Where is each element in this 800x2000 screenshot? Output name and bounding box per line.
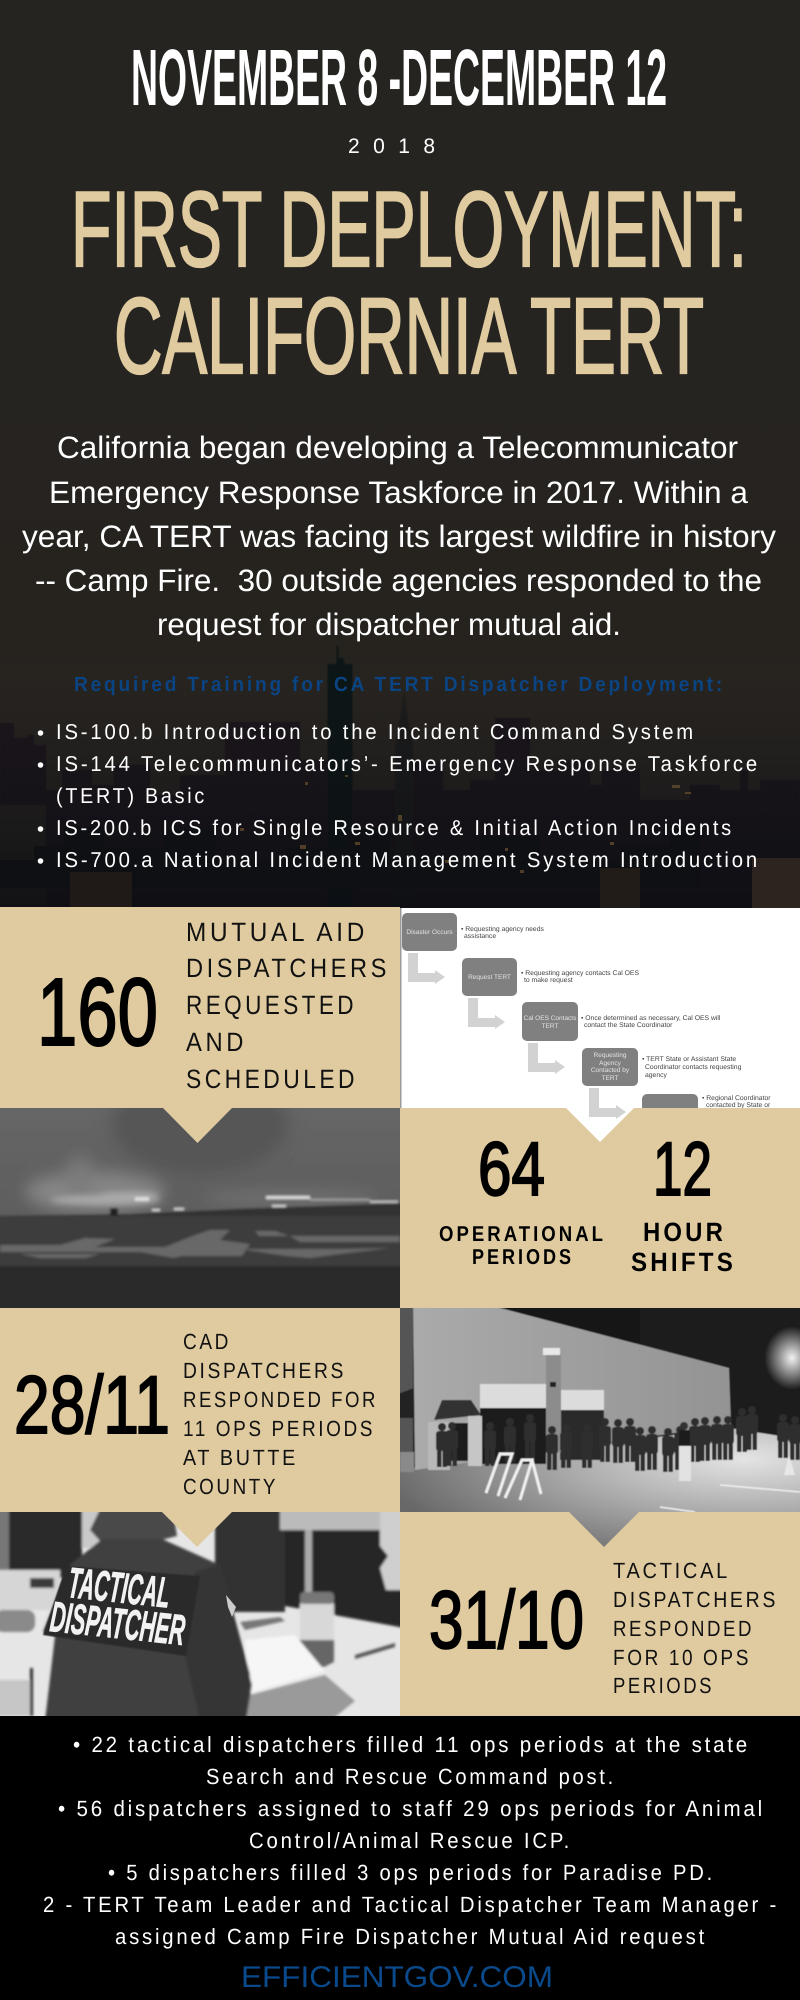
- parking lines: [660, 1485, 800, 1512]
- awning and side door: [400, 1400, 482, 1472]
- label: PERIODS: [613, 1673, 714, 1698]
- training list: (TERT) Basic: [56, 784, 207, 808]
- hair: [89, 1512, 178, 1542]
- arrow: beige pointer into dispatcher photo: [162, 1512, 232, 1547]
- stat labels: [439, 1217, 736, 1277]
- label: FOR 10 OPS: [613, 1645, 751, 1670]
- training heading: Required Training for CA TERT Dispatcher Deployment:: [74, 673, 725, 696]
- flow box labels: [406, 929, 630, 1082]
- intro paragraph: year, CA TERT was facing its largest wildfire in history: [22, 519, 776, 554]
- deployment details: Search and Rescue Command post.: [206, 1764, 616, 1789]
- training list: IS-700.a National Incident Management System Introduction: [56, 848, 760, 872]
- label: CAD: [183, 1329, 231, 1354]
- label: COUNTY: [183, 1474, 278, 1499]
- crowd of people: [436, 1406, 800, 1472]
- label: AT BUTTE: [183, 1445, 298, 1470]
- flow notes: • Once determined as necessary, Cal OES will: [581, 1015, 721, 1022]
- flow arrows: [408, 953, 626, 1119]
- panel: process flow diagram: [400, 907, 800, 1148]
- building wall: [413, 1300, 731, 1470]
- ground: [395, 1428, 800, 1552]
- panel: tactical dispatcher photo: [0, 1505, 405, 1721]
- flow box labels: TERT: [542, 1023, 558, 1030]
- footer panel: [0, 1716, 800, 2000]
- panel: 28/11 CAD dispatchers: [0, 1308, 400, 1512]
- vest patch with lettering: DISPATCHER: [48, 1593, 187, 1655]
- website link: EFFICIENTGOV.COM: [241, 1961, 553, 1994]
- label: REQUESTED: [186, 990, 357, 1020]
- flow notes: Coordinator contacts requesting: [645, 1064, 742, 1071]
- flow box labels: Disaster Occurs: [406, 929, 453, 936]
- panel: 64 operational periods and 12 hour shifts: [400, 1108, 800, 1308]
- flow box labels: Cal OES Contacts: [524, 1015, 577, 1022]
- sandwich board signs: [486, 1454, 541, 1500]
- panel: crowd photo outside warehouse: [395, 1300, 800, 1552]
- deployment details: • 5 dispatchers filled 3 ops periods for Paradise PD.: [108, 1860, 715, 1885]
- flow notes: • Requesting agency needs: [461, 926, 544, 933]
- smoke and flames: [25, 1156, 380, 1212]
- deployment details: assigned Camp Fire Dispatcher Mutual Aid request: [115, 1924, 707, 1949]
- stat labels: OPERATIONAL: [439, 1222, 606, 1246]
- label: [183, 1329, 378, 1499]
- label: RESPONDED: [613, 1616, 754, 1641]
- street lamp glow: [764, 1326, 800, 1390]
- title: [71, 169, 747, 396]
- water on ground: [0, 1230, 400, 1258]
- label: DISPATCHERS: [183, 1358, 346, 1383]
- flow notes: [461, 926, 771, 1109]
- flow box labels: TERT: [602, 1075, 618, 1082]
- flow notes: assistance: [464, 933, 496, 940]
- intro paragraph: request for dispatcher mutual aid.: [157, 607, 621, 642]
- label: [613, 1558, 778, 1698]
- traffic cone: [784, 1455, 795, 1475]
- flow notes: contacted by State or: [706, 1102, 771, 1109]
- flow notes: agency: [645, 1072, 668, 1079]
- panel: tactical dispatchers stat background: 31/10: [429, 1575, 584, 1666]
- label: 11 OPS PERIODS: [183, 1416, 375, 1441]
- deployment details: [43, 1732, 779, 1949]
- flow box labels: Request TERT: [468, 974, 511, 981]
- vest patch with lettering: [43, 1559, 200, 1656]
- skyline foreground and window lights: [0, 775, 800, 908]
- flow notes: • Requesting agency contacts Cal OES: [521, 970, 639, 977]
- flow notes: contact the State Coordinator: [584, 1022, 673, 1029]
- training list: IS-200.b ICS for Single Resource & Initial Action Incidents: [56, 816, 734, 840]
- intro paragraph: [22, 430, 776, 642]
- label: DISPATCHERS: [186, 953, 390, 983]
- hero panel: dark city skyline background: [0, 0, 800, 908]
- training list: IS-100.b Introduction to the Incident Command System: [56, 720, 696, 744]
- vest: [43, 1539, 252, 1721]
- year: 2018: [348, 135, 435, 158]
- foreground person: [679, 1422, 691, 1481]
- table items: [300, 1600, 334, 1644]
- label: MUTUAL AID: [186, 917, 368, 947]
- intro paragraph: California began developing a Telecommunicator: [57, 430, 738, 465]
- panel: wildfire photo: [0, 1108, 400, 1308]
- deployment details: • 22 tactical dispatchers filled 11 ops periods at the state: [73, 1732, 750, 1757]
- skyline silhouette: [0, 646, 800, 908]
- flow box labels: Agency: [599, 1060, 622, 1067]
- flow notes: to make request: [524, 977, 573, 984]
- panel: 28/11 CAD dispatchers: 28/11: [14, 1360, 170, 1451]
- flow box labels: Requesting: [594, 1052, 627, 1059]
- panel: tactical dispatchers stat background: [400, 1512, 800, 1716]
- label: RESPONDED FOR: [183, 1387, 378, 1412]
- intro paragraph: -- Camp Fire. 30 outside agencies responded to the: [35, 563, 762, 598]
- intro paragraph: Emergency Response Taskforce in 2017. Within a: [49, 475, 749, 510]
- flow notes: • TERT State or Assistant State: [642, 1056, 736, 1063]
- label: [186, 917, 390, 1094]
- flow boxes: [402, 913, 698, 1108]
- label: AND: [186, 1027, 247, 1057]
- stat labels: HOUR: [643, 1217, 726, 1247]
- bullet markers: [38, 730, 43, 864]
- panel: 160 mutual aid dispatchers: [0, 907, 400, 1108]
- flow box labels: Contacted by: [591, 1067, 630, 1074]
- background figures and wall: [0, 1505, 405, 1721]
- arrow: beige pointer into wildfire photo: [163, 1108, 232, 1143]
- flow notes: • Regional Coordinator: [702, 1095, 771, 1102]
- label: DISPATCHERS: [613, 1587, 778, 1612]
- sleeve emblem: [226, 1595, 236, 1617]
- vest patch with lettering: TACTICAL: [66, 1559, 172, 1618]
- deployment details: Control/Animal Rescue ICP.: [249, 1828, 572, 1853]
- bay doors: [480, 1348, 604, 1464]
- stat labels: PERIODS: [472, 1245, 574, 1269]
- training list: IS-144 Telecommunicators’- Emergency Response Taskforce: [56, 752, 760, 776]
- training list: [38, 720, 760, 872]
- stat: 64: 64: [478, 1127, 545, 1212]
- stat labels: SHIFTS: [631, 1247, 736, 1277]
- deployment details: • 56 dispatchers assigned to staff 29 ops periods for Animal: [58, 1796, 765, 1821]
- label: TACTICAL: [613, 1558, 730, 1583]
- stat: 12: 12: [653, 1127, 712, 1212]
- label: SCHEDULED: [186, 1064, 358, 1094]
- panel: 160 mutual aid dispatchers: 160: [37, 959, 158, 1066]
